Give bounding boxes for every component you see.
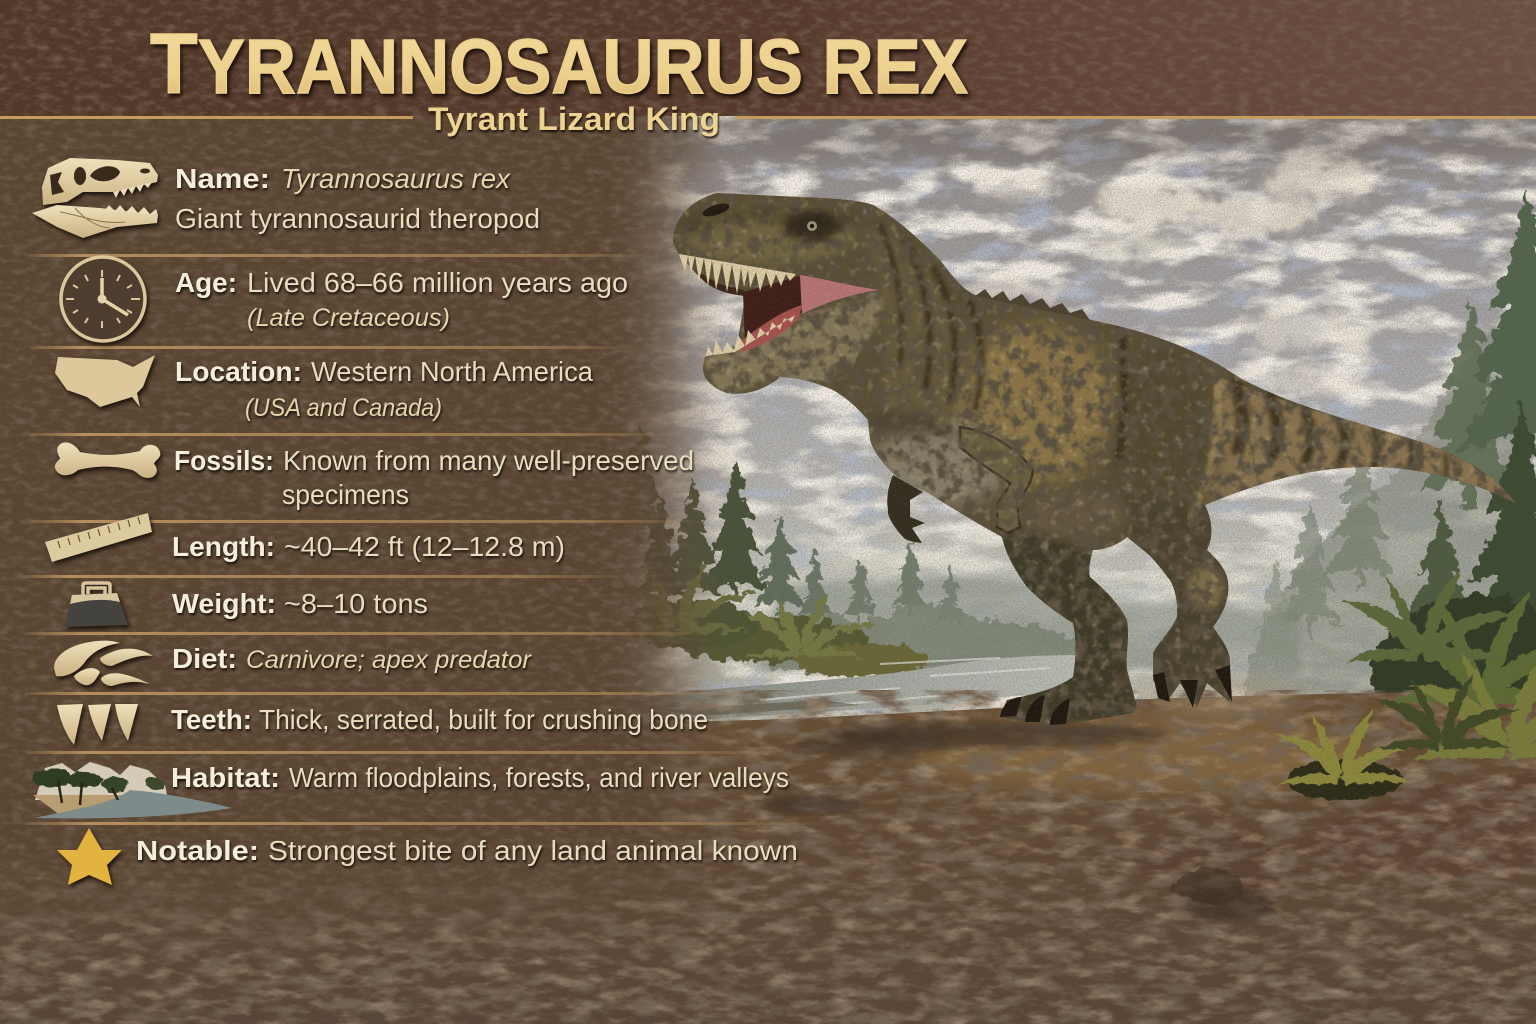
icon: ruler [45,513,152,562]
row: fossils: Fossils: [174,445,274,476]
toe claws [1000,665,1232,725]
row: name: Giant tyrannosaurid theropod [175,203,540,234]
row: age: (Late Cretaceous) [247,304,450,332]
right forest [1240,190,1536,765]
row: notable: Strongest bite of any land animal known [268,835,798,866]
row: fossils [174,445,694,510]
row dividers [20,254,835,825]
icon: dinosaur skull [32,158,158,238]
left information panel background [0,116,736,937]
row: length: Length: [172,531,275,562]
row: teeth: Thick, serrated, built for crushing bone [259,704,708,735]
sky with clouds [0,110,1536,730]
row: age: Lived 68–66 million years ago [247,267,628,298]
row: age: Age: [175,267,237,298]
dinosaur body [673,193,1515,725]
body shading and texture [660,180,1530,730]
row: name [175,163,540,234]
row: habitat: Habitat: [171,762,280,793]
row: weight: ~8–10 tons [284,588,428,619]
icon: weight [65,583,128,627]
distant misty hills [760,576,1300,670]
row: diet [172,643,533,674]
lower teeth [706,315,795,356]
gold rule right of subtitle [736,116,1536,119]
row: teeth: Teeth: [171,704,252,735]
far arm and claw [887,475,925,543]
row: age [175,267,628,332]
top title band [0,0,1536,116]
left conifer trees [610,420,965,676]
row: location: Western North America [311,356,593,387]
back spines [975,289,1090,320]
text rows [136,163,798,866]
river [620,655,1090,722]
icon: north america map [55,355,155,407]
subtitle: Tyrant Lizard King [428,101,720,137]
gold rule left of subtitle [0,116,413,119]
icon: bone [55,442,160,478]
band texture [0,0,1536,116]
row: notable: Notable: [136,835,259,866]
icon: habitat scene [32,762,232,818]
title: TYRANNOSAURUS REX [150,17,968,112]
row: name: Name: [175,163,270,194]
row: weight [172,588,428,619]
icon: teeth [57,704,138,745]
ground mounds [1290,772,1536,876]
muddy ground [0,684,1536,1024]
row: weight: Weight: [172,588,276,619]
upper teeth [679,254,796,294]
tyrannosaurus illustration [660,180,1530,730]
row: location [175,356,593,422]
open mouth [695,270,880,352]
row: name: Tyrannosaurus rex [281,163,511,194]
row: location: (USA and Canada) [245,394,442,422]
icon: clock [61,257,145,341]
row: fossils: Known from many well-preserved [283,445,694,476]
row: location: Location: [175,356,302,387]
row: length: ~40–42 ft (12–12.8 m) [284,531,565,562]
nostril and eye [701,201,817,231]
row: diet: Carnivore; apex predator [246,646,533,674]
icon: gold star [57,828,122,885]
row: fossils: specimens [282,479,409,510]
icon: claws [54,641,153,686]
near arm [960,427,1033,533]
foreground ferns [1275,571,1536,800]
row: habitat: Warm floodplains, forests, and river valleys [289,762,789,793]
row: diet: Diet: [172,643,237,674]
